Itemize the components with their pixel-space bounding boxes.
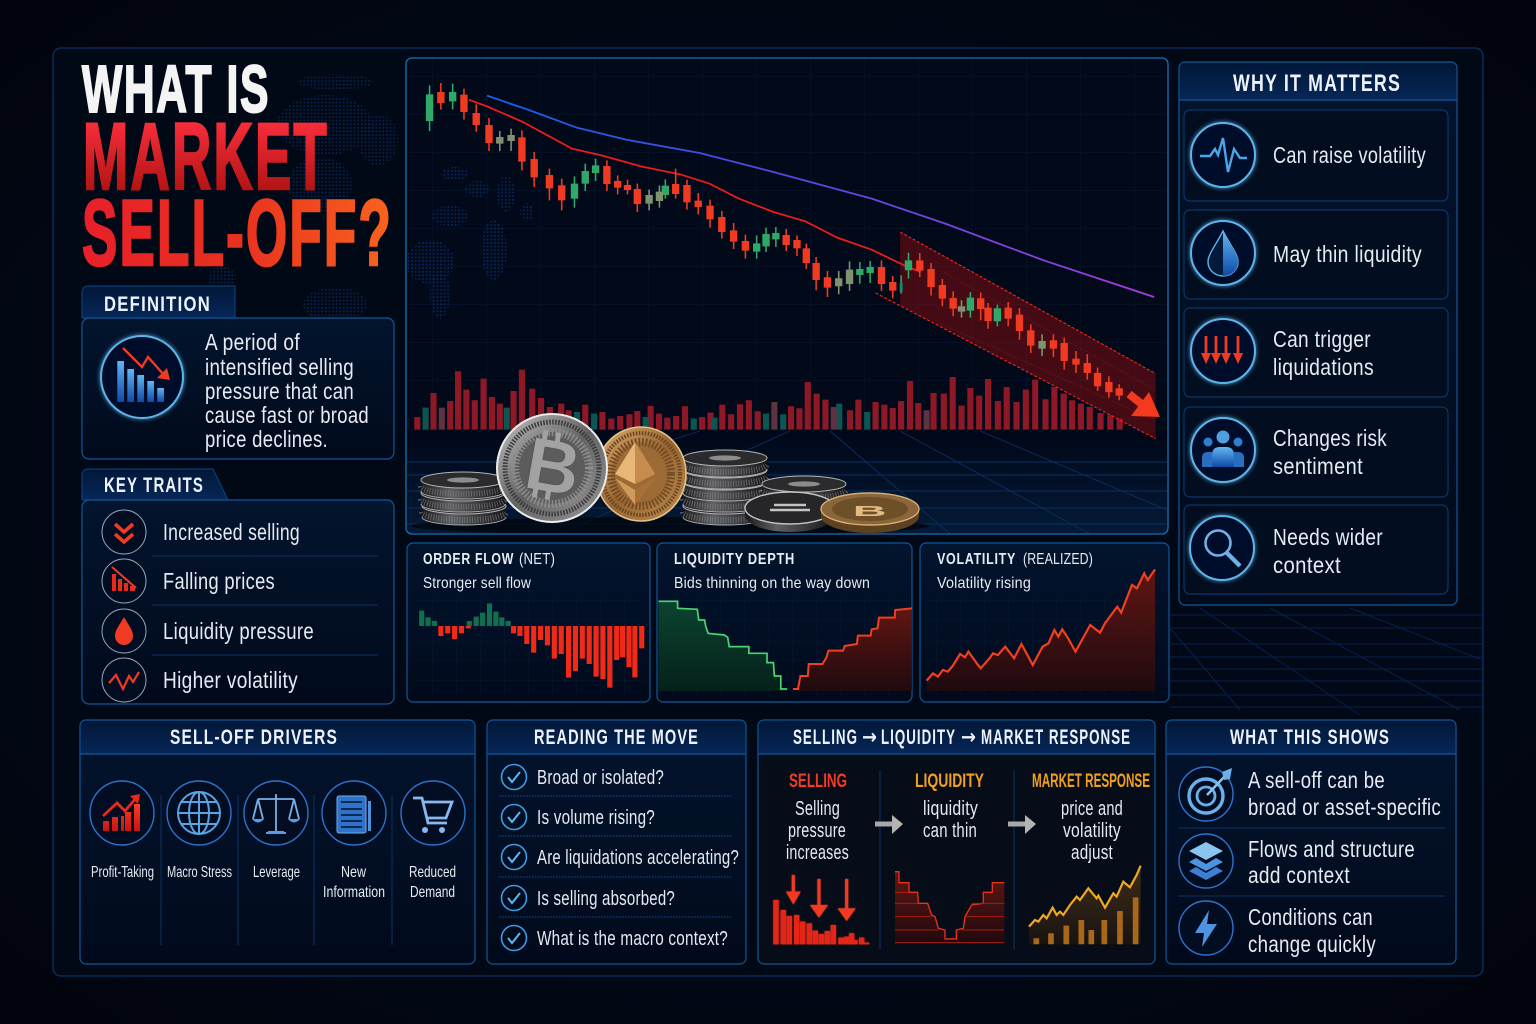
item: needs wider context: context [1273,552,1341,578]
panel: order flow: Stronger sell flow [423,575,531,592]
trait: increased selling [102,510,300,554]
heading: volatility [937,551,1093,568]
heading: sell-off drivers: SELL-OFF DRIVERS [170,726,338,749]
trait: higher volatility [102,658,298,702]
mini depth chart [895,872,1004,944]
arrow: liquidity to market response [1008,815,1036,834]
coin: bitcoin: B [519,420,587,512]
driver: reduced demand: Demand [410,884,455,901]
panel: volatility: Volatility rising [937,575,1031,592]
heading: what this shows: WHAT THIS SHOWS [1230,726,1390,749]
column: market response [1029,771,1150,944]
heading: flow: → [961,725,976,749]
check item: broad or isolated [502,764,664,790]
check item: selling absorbed [502,886,675,910]
check item: is volume rising [502,804,655,830]
check item: is volume rising: Is volume rising? [537,807,655,829]
panel: liquidity depth [657,543,912,702]
driver: profit-taking: Profit-Taking [91,864,154,881]
trait: falling prices [102,559,275,603]
heading: reading the move: READING THE MOVE [534,726,699,749]
heading: flow: → [862,725,877,749]
column: liquidity: can thin [923,820,977,842]
panel: sell-off drivers [80,720,475,964]
item: can raise volatility: Can raise volatility [1273,142,1426,168]
trait: falling prices: Falling prices [163,568,275,594]
item: target: broad or asset-specific [1248,794,1441,820]
chart plot scaled group [417,83,1156,439]
column: market response: MARKET RESPONSE [1032,771,1150,792]
heading: flow: LIQUIDITY [881,726,956,749]
heading: liquidity depth: LIQUIDITY DEPTH [674,551,795,568]
column: selling [776,771,867,944]
driver: new information: Information [323,884,385,901]
coin: flat gold: B [853,503,887,519]
check item: liquidations: Are liquidations accelerating? [537,847,739,869]
item: target [1179,767,1441,821]
check item: macro context [502,926,728,950]
driver: new information [322,781,386,901]
driver: reduced demand [401,781,465,901]
floor grid [407,431,1167,534]
column: market response: volatility [1063,820,1121,842]
title: MARKET [83,104,329,210]
item: lightning: change quickly [1248,931,1376,957]
driver: new information: New [341,864,366,881]
world map dots [406,167,534,319]
mini line and bars [1029,866,1141,944]
panel: why it matters [1179,62,1457,605]
coin: bitcoin [497,414,607,522]
item: changes risk sentiment [1184,407,1448,497]
volume bars [417,370,1120,430]
column: selling: pressure [788,820,846,842]
driver: macro stress: Macro Stress [167,864,232,881]
item: changes risk sentiment: sentiment [1273,453,1363,479]
driver: macro stress [167,781,232,881]
coin: flat gold [821,493,919,533]
trait: liquidity pressure [102,609,314,653]
check item: broad or isolated: Broad or isolated? [537,767,664,789]
coin stack small [762,476,846,503]
panel: definition [82,286,394,459]
item: layers: add context [1248,862,1350,888]
coin stack right [683,450,767,525]
coin stacks [410,414,930,535]
arrow: selling to liquidity [875,815,903,834]
background floor grid [1170,608,1482,715]
coin: ethereum [596,427,686,521]
panel: selling to liquidity to market response [758,720,1155,964]
item: needs wider context [1184,505,1448,594]
heading: definition: DEFINITION [104,293,211,316]
bar chart: net order flow [422,603,642,688]
world map dots behind title [208,74,398,323]
definition text [205,329,369,452]
title: WHAT IS [82,52,270,127]
heading: volatility: VOLATILITY [937,551,1016,568]
icon: falling bars with arrow [101,336,183,418]
line chart: volatility [927,569,1155,691]
item: can trigger liquidations: liquidations [1273,354,1374,380]
check item: selling absorbed: Is selling absorbed? [537,888,675,910]
arrow: downtrend [1129,392,1160,417]
column: selling: SELLING [789,771,847,792]
check item: liquidations [502,844,739,870]
column: market response: price and [1061,798,1123,820]
candlesticks [430,83,1119,400]
item: changes risk sentiment: Changes risk [1273,425,1387,451]
definition text: A period of [205,329,300,355]
definition text: intensified selling [205,354,354,380]
driver: leverage [244,781,308,881]
column: market response: adjust [1071,842,1113,864]
title [82,52,393,285]
heading: why it matters: WHY IT MATTERS [1233,70,1401,97]
item: can trigger liquidations: Can trigger [1273,326,1371,352]
column: liquidity: liquidity [923,798,978,820]
item: may thin liquidity: May thin liquidity [1273,241,1422,267]
definition text: price declines. [205,426,328,452]
column: selling: increases [786,842,849,864]
definition text: cause fast or broad [205,402,369,428]
panel: reading the move [487,720,746,964]
panel: main price chart [406,58,1168,535]
heading: flow [793,725,1131,749]
trait: increased selling: Increased selling [163,519,300,545]
item: may thin liquidity [1184,210,1448,299]
heading: order flow: ORDER FLOW [423,551,514,568]
item: lightning [1179,901,1376,957]
column: selling: Selling [795,798,840,820]
down channel [876,232,1156,439]
check item: macro context: What is the macro context? [537,928,728,950]
panel: what this shows [1166,720,1456,964]
heading: flow: SELLING [793,726,858,749]
item: can raise volatility [1184,110,1448,201]
trait: higher volatility: Higher volatility [163,667,298,693]
item: target: A sell-off can be [1248,767,1385,793]
panel: liquidity depth: Bids thinning on the way down [674,575,870,592]
driver: profit-taking [90,781,154,881]
heading: volatility: (REALIZED) [1023,551,1093,568]
mini bars with arrows [776,875,867,944]
driver: leverage: Leverage [253,864,300,881]
driver: reduced demand: Reduced [409,864,456,881]
heading: order flow: (NET) [519,551,555,568]
definition text: pressure that can [205,378,354,404]
title: SELL-OFF? [82,180,393,285]
heading: key traits: KEY TRAITS [104,474,204,497]
column: liquidity [895,771,1004,944]
item: lightning: Conditions can [1248,904,1373,930]
item: needs wider context: Needs wider [1273,524,1383,550]
panel: volatility [920,543,1169,702]
trait: liquidity pressure: Liquidity pressure [163,618,314,644]
coin stack left [421,472,506,525]
item: layers [1179,834,1415,888]
panel: order flow [407,543,650,702]
item: can trigger liquidations [1184,308,1448,397]
item: layers: Flows and structure [1248,836,1415,862]
depth chart [658,601,912,691]
moving average lines [469,96,1154,297]
column: liquidity: LIQUIDITY [915,771,984,792]
heading: flow: MARKET RESPONSE [981,726,1131,749]
panel: key traits [82,469,394,704]
coin: flat silver [745,492,835,532]
